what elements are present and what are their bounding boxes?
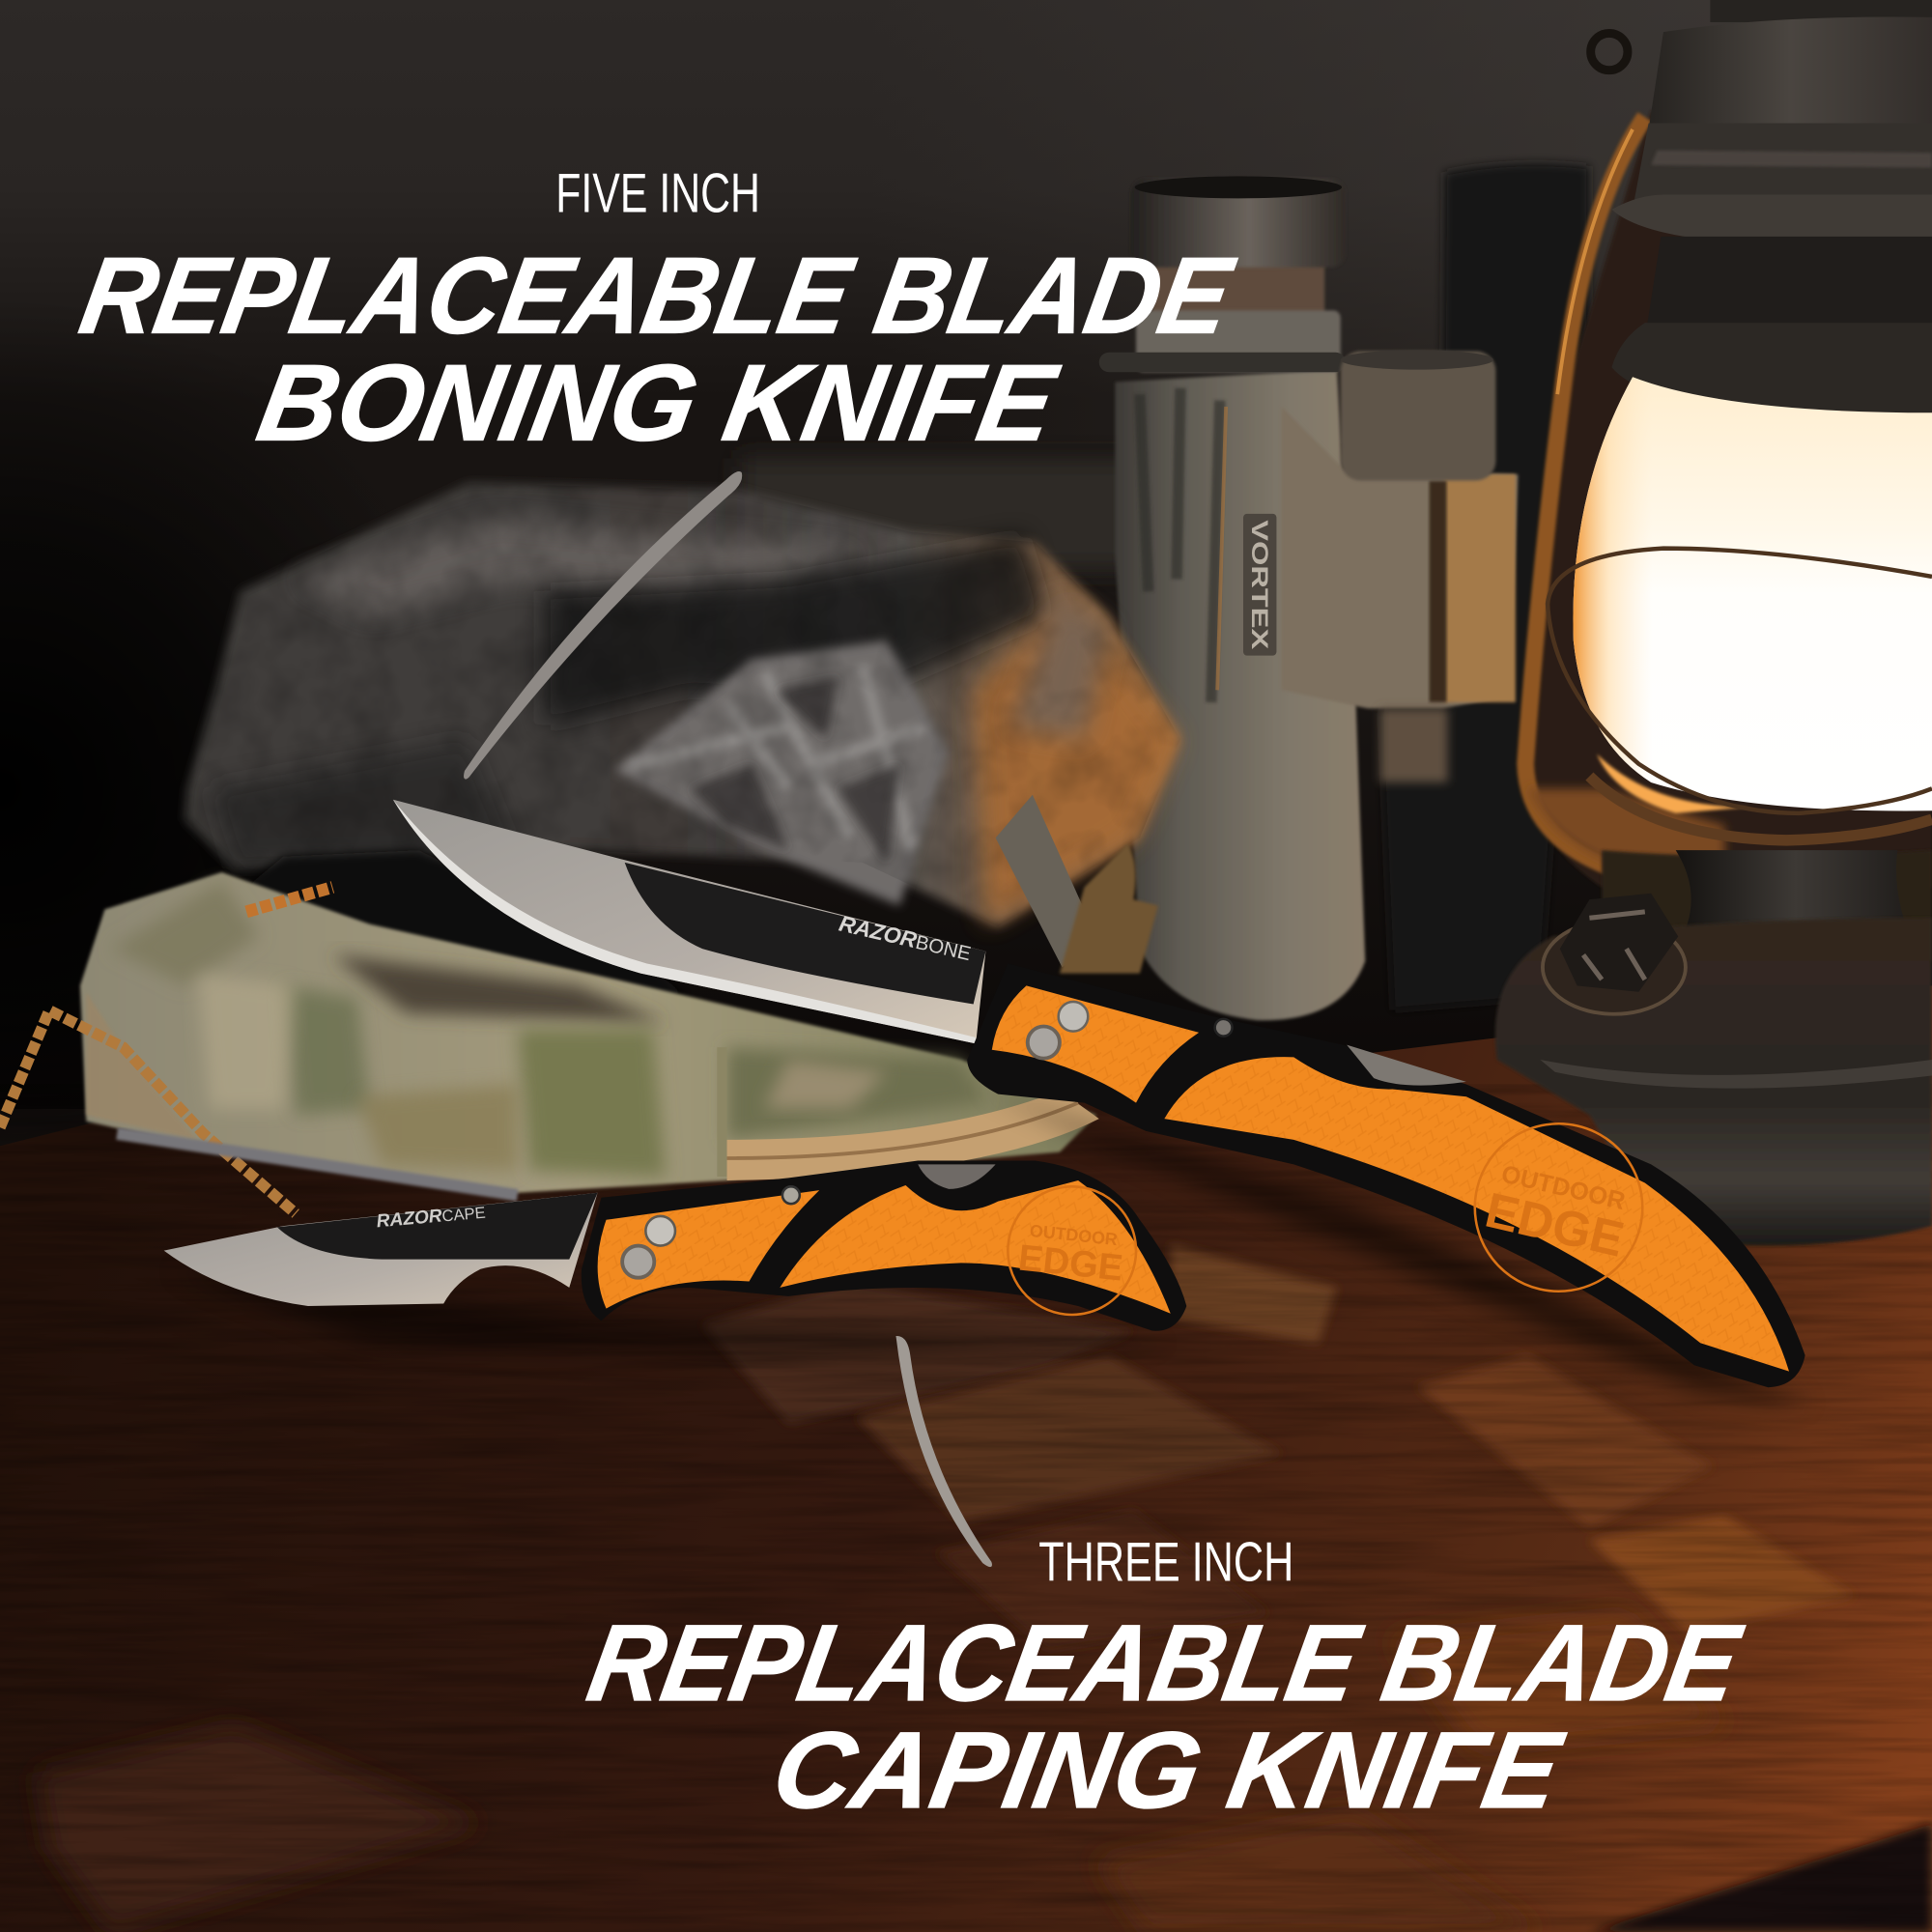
handle black body [967,963,1805,1387]
top rings [1710,0,1932,22]
handle black body [582,1161,1186,1331]
background: dark wall [0,0,1932,1355]
hinge bridge [1282,407,1518,708]
large boning knife [393,800,1811,1405]
logo emboss: EDGE [1016,1237,1124,1290]
orange front scale [992,985,1199,1103]
knife shadow [173,1269,1171,1355]
eyepiece rings [1152,259,1324,321]
binoculars [1099,163,1589,1020]
wire guard [1548,549,1932,813]
heading line 2: BONING KNIFE [250,342,1066,463]
dark interior behind glass [1528,111,1932,887]
heading: replaceable blade caping knife [580,1603,1750,1831]
barrel ribs [1140,388,1220,702]
razorcape mark: RAZORCAPE [376,1203,486,1232]
black blade coating [625,863,985,1005]
arrow: pointer to boning knife [465,472,741,778]
main barrel [1115,370,1365,1020]
glowing glass [1573,377,1932,810]
heading: three inch: THREE INCH [1038,1531,1293,1593]
knife shadow [974,1084,1811,1405]
hanger loop [1591,33,1628,71]
fuel tank [1495,918,1932,1246]
drawcord [0,1010,296,1213]
arrow: pointer to caping knife [897,1337,991,1566]
zipper [727,1091,1099,1180]
wooden table [0,985,1932,1932]
collar [1602,850,1932,961]
logo emboss: EDGE [1481,1182,1629,1267]
heading line 1: REPLACEABLE BLADE [580,1603,1750,1723]
shadow under boning blade [246,850,690,998]
heading line 2: CAPING KNIFE [765,1710,1572,1831]
logo emboss: OUTDOOR [1029,1221,1119,1249]
rear barrel [1380,163,1589,1010]
camo pouch [0,795,1158,1213]
heading: five inch: FIVE INCH [555,162,760,224]
steel blade [164,1193,598,1306]
heading line 1: REPLACEABLE BLADE [72,235,1242,355]
vortex badge [1243,514,1276,656]
finger notch steel [1347,1045,1466,1086]
finger notch steel [918,1164,996,1189]
orange front scale [598,1190,819,1309]
logo emboss [1002,1180,1143,1321]
orange rear scale [780,1180,1171,1314]
steel blade [393,800,985,1043]
sack strap [996,795,1099,967]
focus wheel [1341,352,1495,480]
orange rear scale [1164,1057,1789,1372]
logo emboss: OUTDOOR [1499,1160,1628,1215]
vortex badge: VORTEX [1246,520,1272,649]
heading: replaceable blade boning knife [72,235,1242,463]
small caping knife [164,1161,1186,1355]
frame guard [1525,117,1645,868]
razorbone mark: RAZORBONE [837,911,974,965]
logo emboss [1458,1107,1660,1308]
rivets [1059,1002,1088,1032]
black blade coating [277,1193,598,1260]
filler cap [1543,921,1686,1014]
lantern [1495,0,1932,1246]
stuff sack [185,480,1182,936]
rivets [645,1216,675,1246]
